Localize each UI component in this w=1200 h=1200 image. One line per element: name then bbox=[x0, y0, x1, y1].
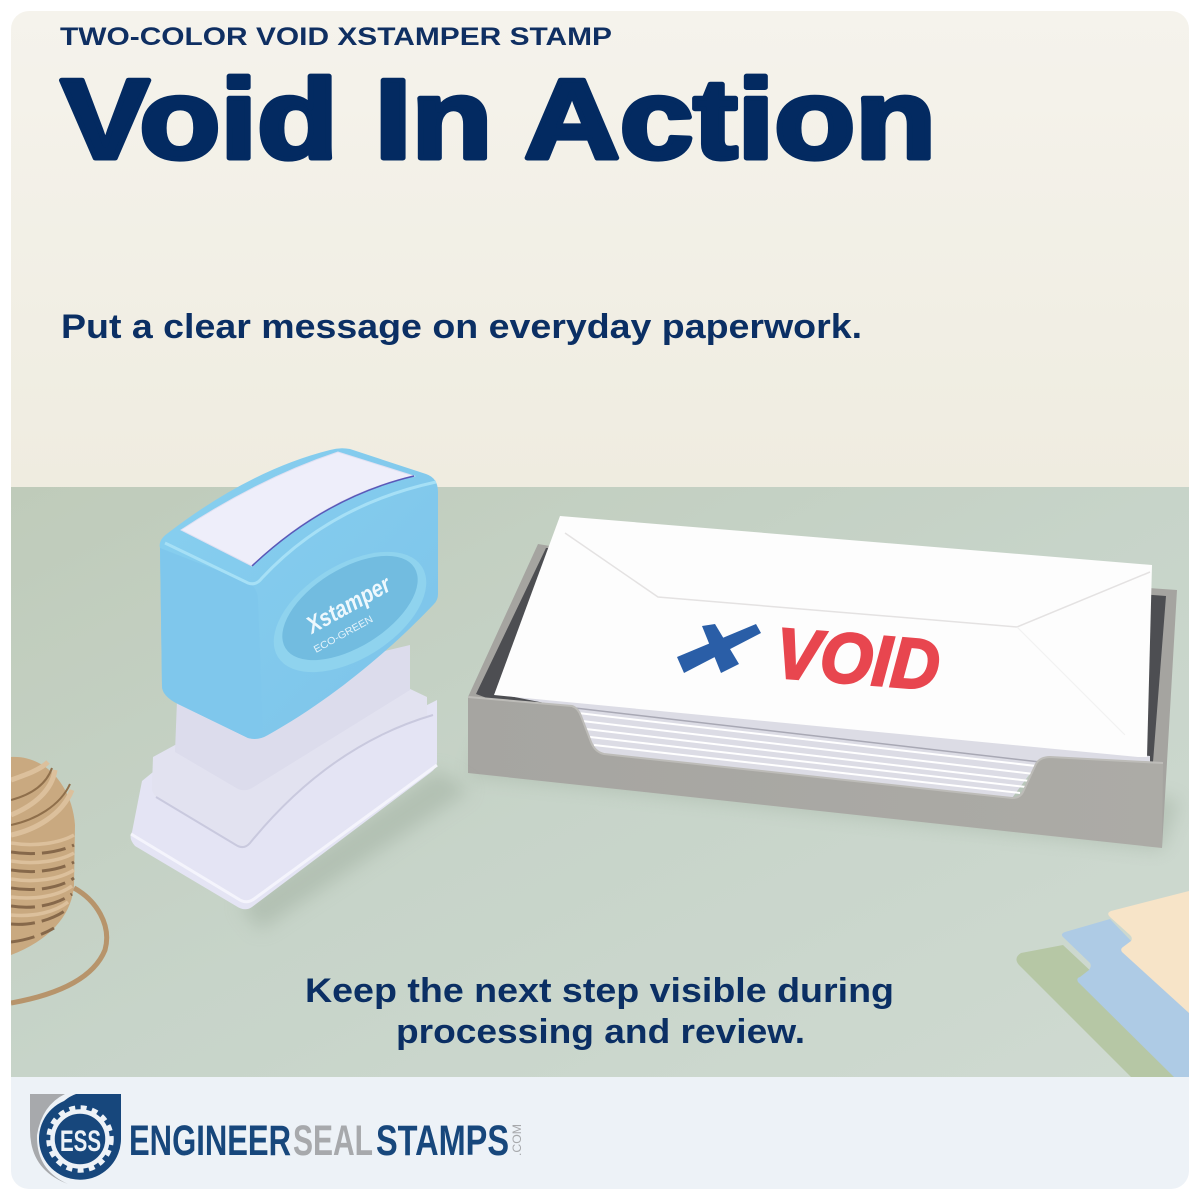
cream folder bbox=[1108, 891, 1189, 1013]
stamp cap rim highlight bbox=[165, 482, 436, 584]
desk surface bbox=[11, 487, 1189, 1078]
stamp logo oval bbox=[274, 552, 426, 672]
footer band bbox=[11, 1077, 1189, 1189]
logo wordmark: ENGINEER bbox=[129, 1117, 291, 1165]
logo initials: ESS bbox=[60, 1125, 101, 1158]
envelope stack bbox=[494, 693, 1150, 798]
icon: Xstamper stamp bbox=[131, 448, 470, 930]
stamp brand text: Xstamper bbox=[300, 570, 397, 640]
icon: file folders bbox=[1016, 891, 1189, 1078]
stamp white label bbox=[181, 452, 414, 566]
logo: Engineer Seal Stamps bbox=[30, 1094, 524, 1184]
tray inner dark bbox=[476, 548, 1166, 762]
eyebrow heading: TWO-COLOR VOID XSTAMPER STAMP bbox=[60, 23, 612, 51]
VOID stamp text: VOID bbox=[773, 614, 942, 706]
logo wordmark bbox=[131, 1125, 508, 1156]
wall background bbox=[11, 11, 1189, 488]
icon: letter tray with envelopes bbox=[468, 516, 1180, 850]
stamp base bbox=[131, 700, 437, 909]
blue folder bbox=[1062, 919, 1189, 1078]
text: bottom message: Keep the next step visible during bbox=[305, 972, 894, 1010]
stamp shadow bbox=[240, 770, 470, 930]
stamp blue cap bbox=[160, 448, 438, 739]
tray shadow bbox=[476, 774, 1178, 851]
tray front wall bbox=[468, 697, 1163, 848]
logo emblem bbox=[30, 1094, 121, 1184]
text: tagline: Put a clear message on everyday paperwork. bbox=[61, 308, 862, 346]
tray back and sides bbox=[468, 544, 1177, 848]
logo wordmark: SEAL bbox=[293, 1117, 373, 1165]
stamp neck bbox=[175, 645, 410, 745]
title: Void In Action bbox=[61, 56, 936, 182]
stamp logo oval: ECO-GREEN bbox=[312, 614, 375, 656]
green folder bbox=[1016, 945, 1175, 1078]
stamp cap side shading bbox=[160, 549, 250, 738]
text: bottom message: processing and review. bbox=[396, 1013, 805, 1051]
logo wordmark: STAMPS bbox=[376, 1117, 509, 1165]
text: bottom message bbox=[305, 972, 894, 1051]
icon: blue X stamp mark bbox=[677, 624, 761, 673]
stamp lower tier bbox=[152, 689, 427, 800]
logo .COM: .COM bbox=[510, 1124, 524, 1156]
icon: twine ball bbox=[11, 757, 107, 1003]
envelope bbox=[494, 516, 1152, 757]
